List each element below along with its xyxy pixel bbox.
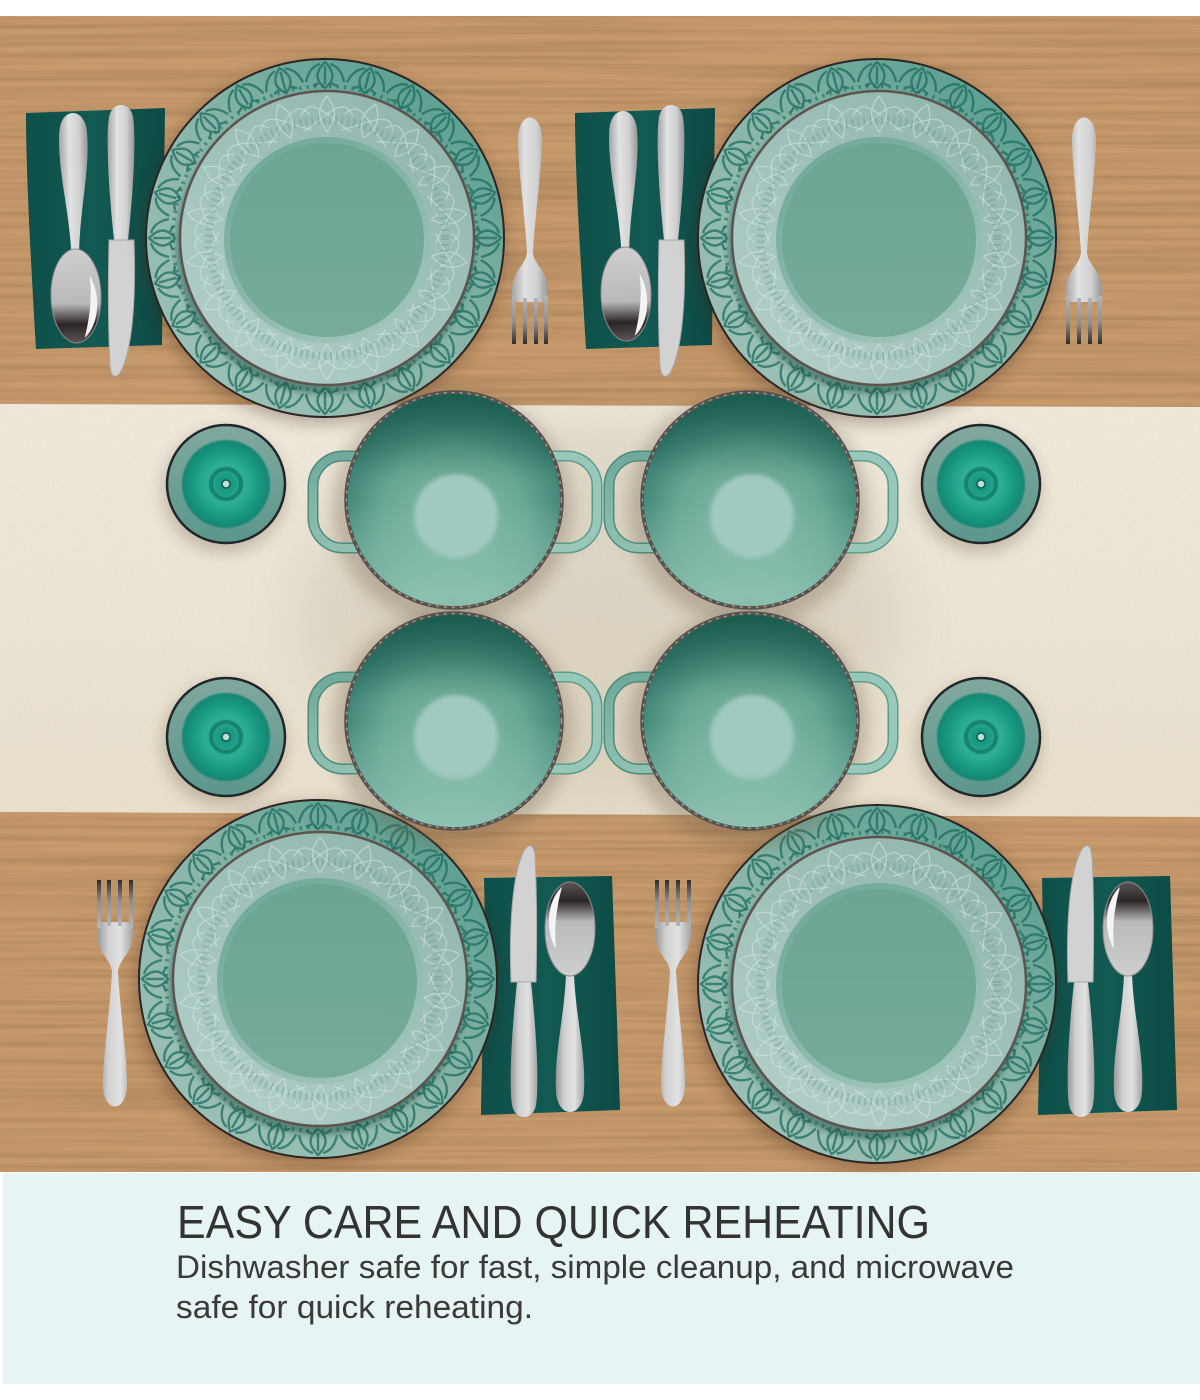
napkin [26,108,165,349]
napkin [575,108,715,349]
fork [1066,118,1102,344]
soup bowl: top right [609,390,893,626]
plates [135,800,497,1165]
place setting: top left [26,59,548,424]
soup bowl: top left [313,390,597,626]
spoon [545,882,595,1112]
panel: caption band [3,1173,1200,1384]
napkin [1038,876,1177,1115]
fork [512,118,548,344]
spoon [1103,882,1153,1112]
knife [108,105,135,376]
knife [510,846,537,1117]
body line 1: Dishwasher safe for fast, simple cleanup, and microwave [176,1249,1014,1285]
condiment dish: bottom right [917,678,1041,806]
spoon [48,113,102,343]
linen table runner [0,404,1200,817]
body line 2: safe for quick reheating. [176,1289,533,1325]
condiment dish: bottom left [162,678,286,806]
knife [1067,846,1094,1117]
plates [142,59,504,424]
plates [694,59,1056,424]
place setting: top right [575,59,1102,424]
plates [694,805,1056,1170]
knife [658,105,685,376]
heading: EASY CARE AND QUICK REHEATING [177,1196,930,1248]
place setting: bottom right [655,805,1177,1170]
napkin [481,876,620,1115]
place setting: bottom left [97,800,620,1165]
spoon [598,111,652,341]
condiment dish: top left [162,425,286,553]
fork [655,880,691,1106]
fork [97,880,133,1106]
condiment dish: top right [917,425,1041,553]
soup bowl: bottom left [313,611,597,847]
soup bowl: bottom right [609,611,893,847]
